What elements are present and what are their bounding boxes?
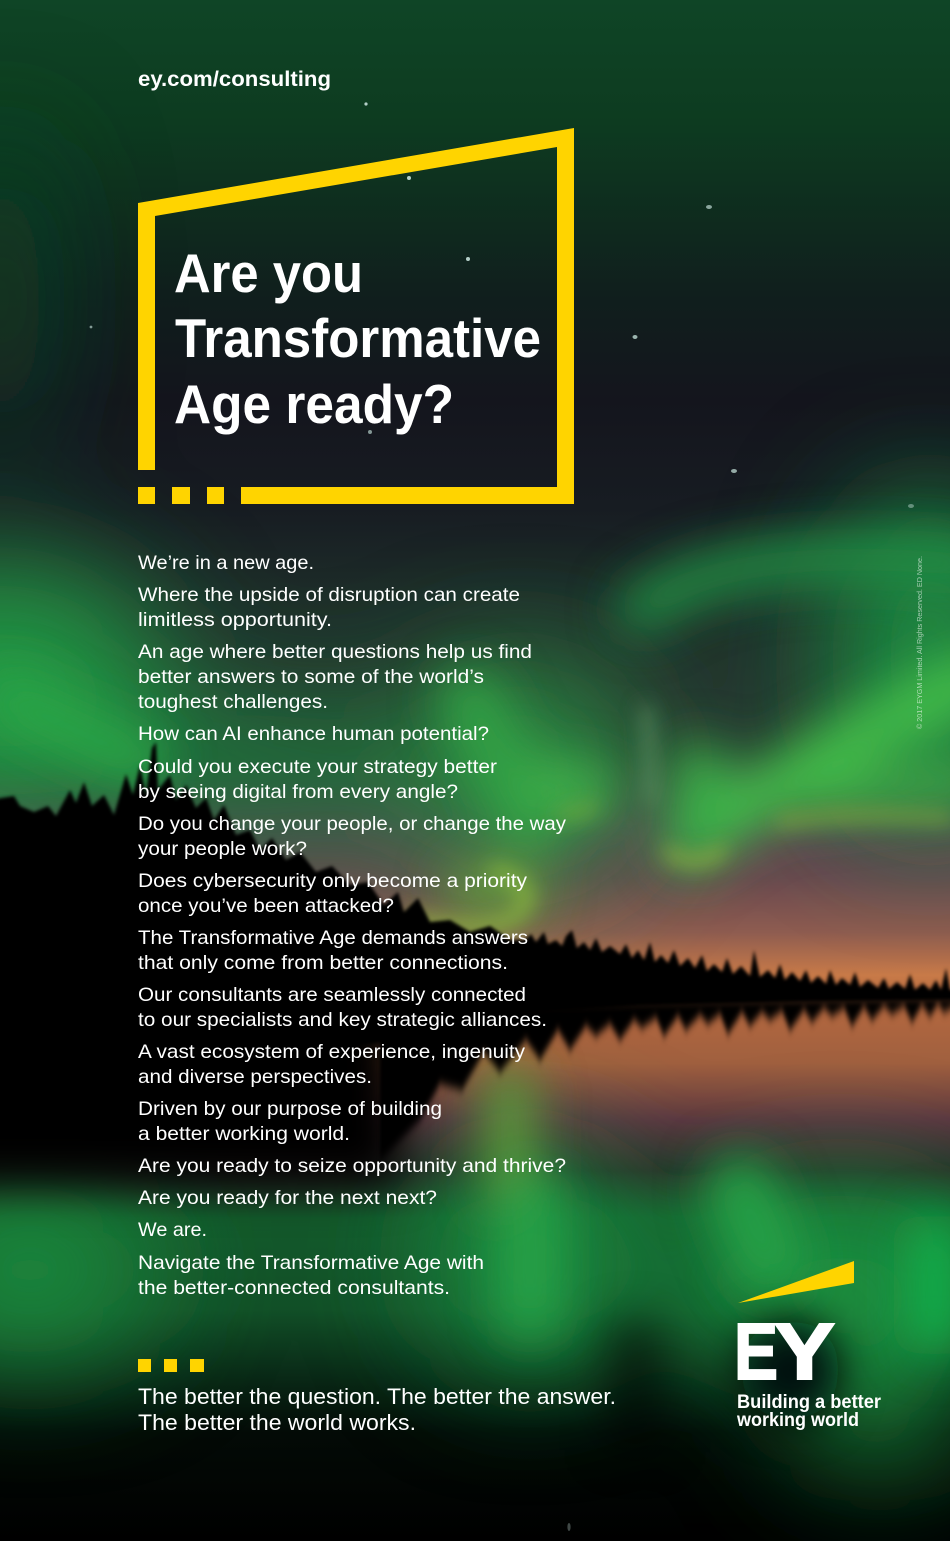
body copy: by seeing digital from every angle? [138,781,458,803]
tagline [138,1384,616,1435]
body copy: a better working world. [138,1123,350,1145]
body copy: limitless opportunity. [138,609,332,631]
tree line silhouette [0,742,950,1090]
body copy: How can AI enhance human potential? [138,723,489,745]
title: Age ready? [174,373,454,435]
EY logo: working world [736,1410,859,1431]
EY logo: E [734,1307,778,1396]
body copy: Does cybersecurity only become a priority [138,870,527,892]
title: Transformative [175,307,541,369]
body copy: Are you ready for the next next? [138,1187,437,1209]
tagline: The better the question. The better the answer. [138,1384,616,1409]
body copy: to our specialists and key strategic alliances. [138,1009,547,1031]
reflected tree line [380,996,950,1160]
small yellow squares [138,1359,204,1372]
EY logo: Y [774,1307,835,1396]
body copy: Do you change your people, or change the way [138,813,566,835]
body copy: once you’ve been attacked? [138,895,394,917]
EY logo [734,1261,882,1431]
body copy: The Transformative Age demands answers [138,927,528,949]
EY logo: Building a better [737,1392,882,1413]
body copy [138,552,566,1299]
tagline: The better the world works. [138,1410,416,1435]
body copy: Are you ready to seize opportunity and thrive? [138,1155,566,1177]
body copy: We are. [138,1219,207,1241]
body copy: Where the upside of disruption can create [138,584,520,606]
body copy: We’re in a new age. [138,552,314,574]
body copy: A vast ecosystem of experience, ingenuity [138,1041,525,1063]
body copy: Our consultants are seamlessly connected [138,984,526,1006]
body copy: your people work? [138,838,307,860]
body copy: Driven by our purpose of building [138,1098,442,1120]
dark mass of the near shore and its reflection [0,960,840,1450]
body copy: Navigate the Transformative Age with [138,1252,484,1274]
aurora curtains [10,559,950,1330]
body copy: Could you execute your strategy better [138,756,498,778]
body copy: the better-connected consultants. [138,1277,450,1299]
body copy: toughest challenges. [138,691,328,713]
yellow-green aurora edges [410,710,950,927]
body copy: better answers to some of the world’s [138,666,484,688]
body copy: that only come from better connections. [138,952,508,974]
url: ey.com/consulting [138,68,331,91]
body copy: and diverse perspectives. [138,1066,372,1088]
copyright line: © 2017 EYGM Limited. All Rights Reserved. ED None. [916,556,924,729]
yellow frame [138,128,574,504]
title: Are you [174,242,363,304]
body copy: An age where better questions help us find [138,641,532,663]
title [174,242,541,435]
